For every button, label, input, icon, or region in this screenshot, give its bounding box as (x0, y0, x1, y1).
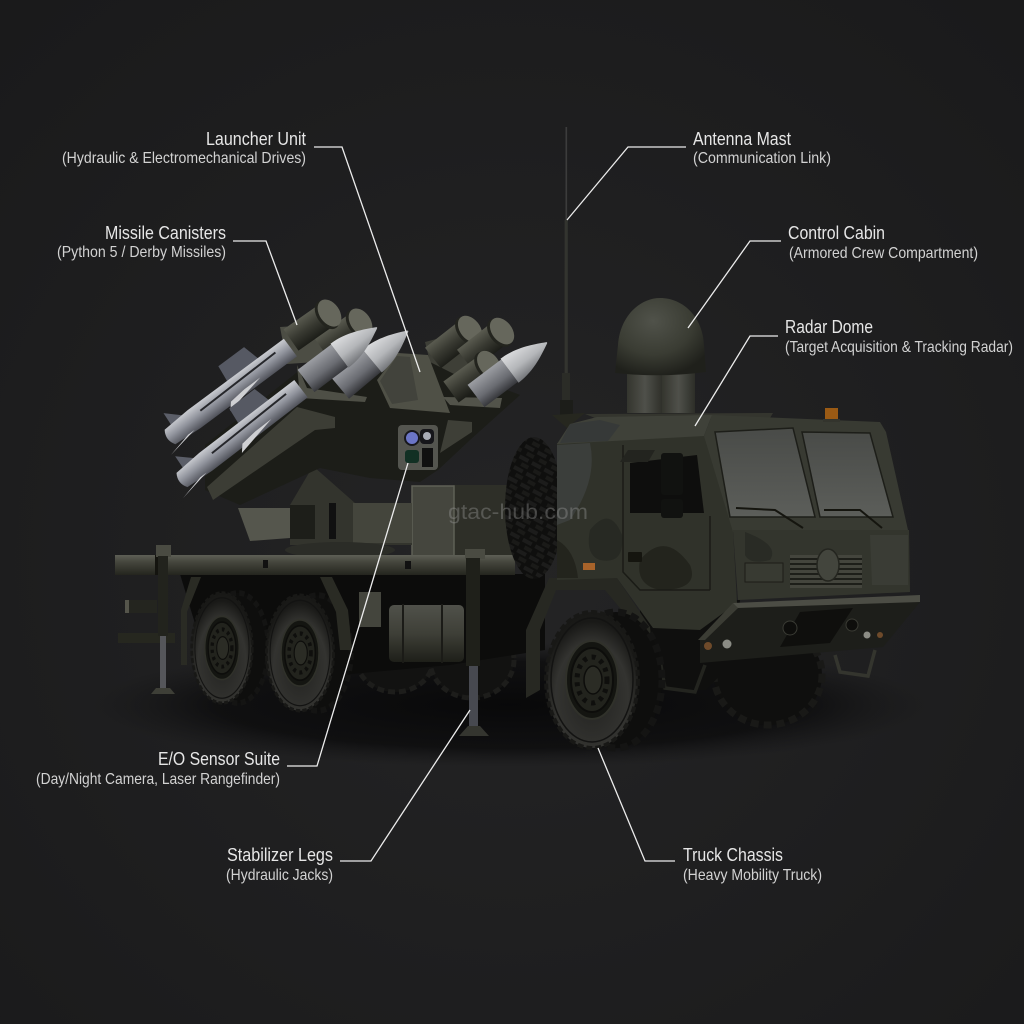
bumper and lights (660, 595, 920, 692)
chassis frame (180, 574, 545, 675)
callout: radar dome: Radar Dome (785, 316, 873, 337)
dark under-cab block (640, 600, 740, 690)
cab front (704, 415, 910, 600)
launcher unit central box (377, 353, 450, 413)
electro-optical sensor suite (398, 425, 438, 470)
callout: missile canisters: Missile Canisters (105, 222, 226, 243)
vehicle illustration (90, 127, 930, 767)
callout: truck chassis (598, 748, 822, 884)
ground shadow (90, 643, 930, 767)
callout: missile canisters: (Python 5 / Derby Missiles) (57, 244, 226, 261)
callout: launcher unit: Launcher Unit (206, 128, 306, 149)
callout: antenna mast (567, 128, 831, 220)
fuel tank (389, 604, 464, 663)
front wheel (546, 612, 662, 748)
side window and door (620, 450, 704, 518)
callout: launcher unit (62, 128, 420, 372)
rear wheels (192, 593, 351, 711)
callout: radar dome (695, 316, 1013, 426)
missiles (145, 294, 418, 498)
flatbed deck (115, 555, 515, 575)
callout: truck chassis: Truck Chassis (683, 844, 783, 865)
amber beacon (823, 408, 840, 422)
callout: missile canisters (57, 222, 297, 325)
launcher dark mass (205, 360, 520, 505)
cab roof (557, 413, 773, 444)
launcher: right front rack (440, 330, 556, 453)
rear stabilizer leg (118, 545, 175, 694)
callout: stabilizer legs (226, 710, 470, 884)
radar dome assembly (615, 298, 706, 413)
callout: stabilizer legs: (Hydraulic Jacks) (226, 867, 333, 884)
callout: control cabin (688, 222, 978, 328)
callout: E/O sensor suite: E/O Sensor Suite (158, 748, 280, 769)
callout: E/O sensor suite: (Day/Night Camera, Laser Rangefinder) (36, 771, 280, 788)
spare tyre (505, 437, 563, 579)
watermark: gtac-hub.com (448, 501, 588, 524)
antenna mast (552, 127, 585, 428)
callout: stabilizer legs: Stabilizer Legs (227, 844, 333, 865)
mid stabilizer leg (459, 549, 489, 736)
callout: antenna mast: Antenna Mast (693, 128, 791, 149)
launcher: right rear canisters (423, 310, 520, 382)
turret back box (412, 485, 513, 560)
truck cab side wall (557, 435, 737, 630)
far side wheels (357, 622, 822, 725)
callout: truck chassis: (Heavy Mobility Truck) (683, 867, 822, 884)
front fender (526, 578, 653, 698)
callout: control cabin: Control Cabin (788, 222, 885, 243)
launcher: left rack (207, 303, 378, 500)
callout: launcher unit: (Hydraulic & Electromechanical Drives) (62, 150, 306, 167)
turret pedestal (238, 466, 412, 558)
callout: control cabin: (Armored Crew Compartment) (789, 245, 978, 262)
callout: E/O sensor suite (36, 463, 408, 788)
mudguards and brackets (181, 577, 381, 665)
callout: antenna mast: (Communication Link) (693, 150, 831, 167)
